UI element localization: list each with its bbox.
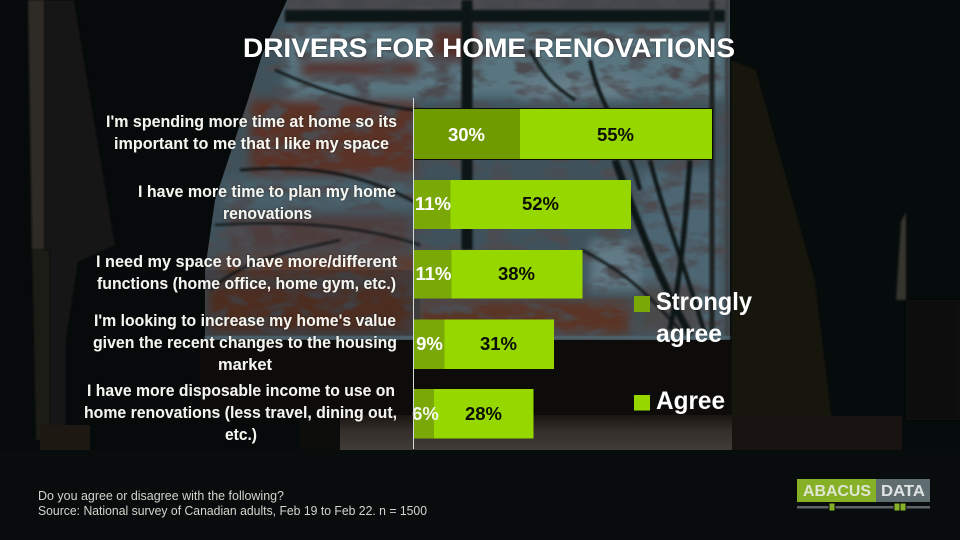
label: more functions: functions (home office, home gym, etc.) <box>97 275 396 293</box>
label: disposable income: etc.) <box>225 426 257 444</box>
bar row 3: 11% and 38%: 11% <box>415 263 452 284</box>
label: spending more time <box>106 113 397 153</box>
right curtain <box>730 0 960 470</box>
label: home value <box>93 312 397 374</box>
label: home value: given the recent changes to the housing <box>93 334 397 352</box>
bar row 3: 11% and 38%: 38% <box>498 263 535 284</box>
label: home value: market <box>218 356 272 374</box>
stacked bar chart <box>412 98 713 449</box>
label: more time to plan: I have more time to plan my home <box>138 183 396 201</box>
logo: Abacus Data <box>797 479 930 511</box>
bar row 4: 9% and 31% <box>414 320 554 369</box>
legend item: agree: Agree <box>656 387 725 415</box>
left curtain <box>0 0 420 470</box>
bar row 2: 11% and 52%: 11% <box>415 193 451 214</box>
label: disposable income <box>84 382 397 444</box>
label: more functions: I need my space to have more/different <box>96 253 397 271</box>
bar row 3: 11% and 38% <box>414 250 582 298</box>
bar row 4: 9% and 31%: 31% <box>480 333 517 354</box>
footnote: Do you agree or disagree with the following? <box>38 489 284 503</box>
label: more time to plan <box>138 183 396 223</box>
label: more time to plan: renovations <box>223 205 312 223</box>
legend item: strongly agree: Strongly <box>656 288 752 316</box>
label: home value: I'm looking to increase my home's value <box>94 312 396 330</box>
footnote: Source: National survey of Canadian adults, Feb 19 to Feb 22. n = 1500 <box>38 504 427 518</box>
label: disposable income: I have more disposable income to use on <box>87 382 395 400</box>
dark foliage mottling <box>200 0 730 340</box>
footnote <box>38 489 427 518</box>
title: DRIVERS FOR HOME RENOVATIONS <box>243 33 735 63</box>
bar row 1: 30% and 55%: 55% <box>597 124 634 145</box>
bar row 1: 30% and 55%: 30% <box>448 124 485 145</box>
bar row 2: 11% and 52% <box>414 180 631 229</box>
logo: Abacus Data: DATA <box>881 483 925 500</box>
bar row 4: 9% and 31%: 9% <box>416 333 443 354</box>
label: spending more time: I'm spending more time at home so its <box>106 113 397 131</box>
label: more functions <box>96 253 397 293</box>
bar row 1: 30% and 55% <box>414 109 712 159</box>
logo: Abacus Data: ABACUS <box>803 483 871 500</box>
legend item: strongly agree: agree <box>656 320 722 348</box>
legend item: strongly agree <box>634 288 752 348</box>
bar row 5: 6% and 28%: 6% <box>412 403 439 424</box>
window frame and branches <box>210 0 727 340</box>
bar row 2: 11% and 52%: 52% <box>522 193 559 214</box>
bar row 5: 6% and 28%: 28% <box>465 403 502 424</box>
legend <box>634 288 752 415</box>
category labels <box>84 113 397 444</box>
vertical axis <box>413 98 414 449</box>
bar shadows <box>414 108 713 160</box>
label: disposable income: home renovations (less travel, dining out, <box>84 404 397 422</box>
window sill and room below <box>0 336 960 540</box>
bar row 5: 6% and 28% <box>412 389 534 438</box>
window view <box>200 0 730 340</box>
label: spending more time: important to me that I like my space <box>114 135 389 153</box>
